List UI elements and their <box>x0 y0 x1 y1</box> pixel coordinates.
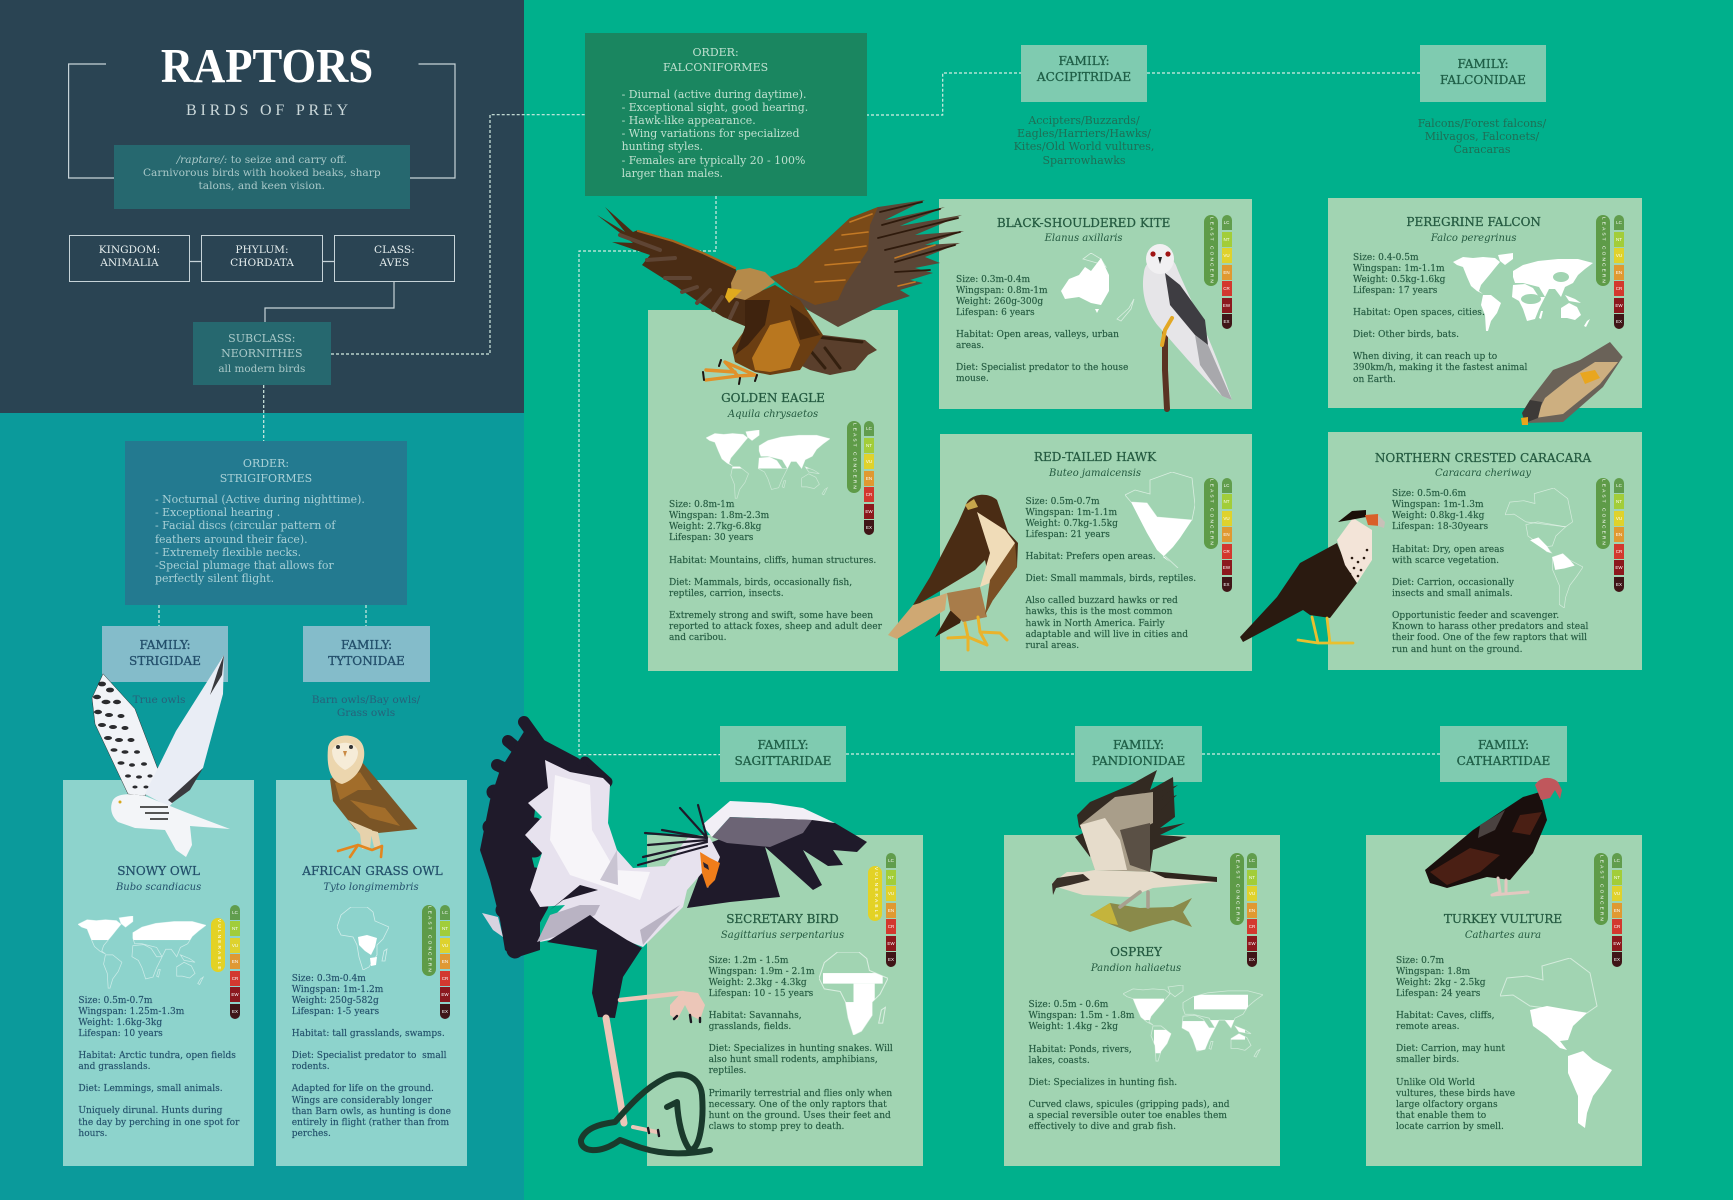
box: subclass: SUBCLASS: NEORNITHES all modern birds <box>218 332 305 375</box>
conservation status scale: LC <box>1224 220 1229 225</box>
species name: Pandion haliaetus <box>1091 963 1181 974</box>
text: strigiformes traits: - Nocturnal (Active during nighttime). - Exceptional hearing . - Facial discs (circular pattern of feathers around their face). - Extremely flexible necks. -Special plumage that allows for perfectly silent flight. <box>155 493 365 585</box>
panel: golden eagle <box>648 310 898 671</box>
definition box <box>114 145 410 209</box>
conservation status scale: EN <box>1223 532 1230 537</box>
conservation status scale: NT <box>1249 874 1255 880</box>
conservation status scale: LC <box>1224 483 1229 488</box>
conservation status label: LEAST CONCERN <box>1234 855 1240 923</box>
conservation status scale: EN <box>1616 532 1622 537</box>
conservation status scale <box>886 853 896 967</box>
conservation status scale: VU <box>232 942 238 948</box>
text: caracara facts: Size: 0.5m-0.6m Wingspan: 1m-1.3m Weight: 0.8kg-1.4kg Lifespan: 18-30years Habitat: Dry, open areas with scarce vegetation. Diet: Carrion, occasionally insects and small animals. Opportunistic feeder and scavenger. Known to harass other predators and steal their food. One of the few raptors that will run and hunt on the ground. <box>1392 489 1588 654</box>
conservation status scale: EW <box>1223 302 1230 308</box>
species name: Buteo jamaicensis <box>1049 468 1141 479</box>
conservation status scale: NT <box>1614 874 1620 880</box>
icon: african grass owl <box>328 736 418 857</box>
text: african grass owl facts: Size: 0.3m-0.4m Wingspan: 1m-1.2m Weight: 250g-582g Lifespan: 1-5 years Habitat: tall grasslands, swamps. Diet: Specialist predator to small rodents. Adapted for life on the ground. Wings are considerably longer than Barn owls, as hunting is done entirely in flight (rather than from perches. <box>292 974 451 1139</box>
heading: order falconiformes: ORDER: FALCONIFORMES <box>663 46 768 74</box>
conservation status label: VULNERABLE <box>873 867 878 920</box>
conservation status label: LEAST CONCERN <box>1601 216 1606 284</box>
map: turkey vulture range <box>1500 958 1612 1128</box>
conservation status label <box>422 904 436 976</box>
conservation status scale: EX <box>866 525 872 530</box>
box: kingdom <box>69 235 190 282</box>
species name: Sagittarius serpentarius <box>721 930 844 941</box>
box: family falconidae: FAMILY: FALCONIDAE <box>1440 57 1526 87</box>
box: family accipitridae: FAMILY: ACCIPITRIDAE <box>1037 54 1131 84</box>
heading: golden eagle: GOLDEN EAGLE <box>721 391 825 405</box>
conservation status scale: LC <box>1616 220 1622 225</box>
conservation status scale: EN <box>1249 908 1255 912</box>
icon: osprey with fish <box>1052 770 1217 932</box>
definition box: /raptare/: to seize and carry off. Carnivorous birds with hooked beaks, sharp talons, and keen vision. <box>143 154 381 192</box>
conservation status scale: EN <box>1614 908 1620 912</box>
species name: Cathartes aura <box>1465 930 1541 941</box>
map: golden eagle range <box>706 430 830 499</box>
box: class <box>334 235 455 282</box>
text: snowy owl facts: Size: 0.5m-0.7m Wingspan: 1.25m-1.3m Weight: 1.6kg-3kg Lifespan: 10 years Habitat: Arctic tundra, open fields and grasslands. Diet: Lemmings, small animals. Uniquely dirunal. Hunts during the day by perching in one spot for hours. <box>78 996 239 1139</box>
conservation status scale: EN <box>1223 270 1230 274</box>
conservation status scale: EN <box>1616 270 1622 274</box>
heading: osprey: OSPREY <box>1110 945 1162 959</box>
conservation status scale <box>1614 215 1624 329</box>
conservation status scale: NT <box>232 926 238 931</box>
conservation status scale: EX <box>1616 319 1622 324</box>
conservation status scale <box>230 905 240 1019</box>
map: kite range <box>1061 253 1134 322</box>
species name: Bubo scandiacus <box>116 882 201 892</box>
conservation status scale: NT <box>1224 236 1230 242</box>
conservation status scale: EX <box>1223 582 1230 587</box>
conservation status scale: NT <box>1224 499 1230 504</box>
species name: Aquila chrysaetos <box>728 409 818 420</box>
conservation status scale: CR <box>888 924 894 929</box>
conservation status scale: VU <box>1223 253 1230 258</box>
panel: taxonomy header background <box>0 0 524 413</box>
title: RAPTORS <box>160 38 373 93</box>
conservation status scale: VU <box>1616 253 1622 258</box>
text: osprey facts: Size: 0.5m - 0.6m Wingspan: 1.5m - 1.8m Weight: 1.4kg - 2kg Habitat: Ponds, rivers, lakes, coasts. Diet: Specializes in hunting fish. Curved claws, spicules (gripping pads), and a special reversible outer toe enables them effectively to dive and grab fish. <box>1028 1000 1230 1132</box>
map: secretary bird range <box>819 952 888 1035</box>
box: family accipitridae <box>1021 45 1147 102</box>
icon: red-tailed hawk <box>888 495 1018 650</box>
conservation status scale: CR <box>866 492 872 497</box>
panel: secretary bird <box>647 835 923 1166</box>
box: family cathartidae: FAMILY: CATHARTIDAE <box>1457 738 1550 768</box>
conservation status label: LEAST CONCERN <box>1601 479 1606 547</box>
conservation status scale: EW <box>441 992 449 997</box>
icon: golden eagle <box>597 200 964 384</box>
heading: secretary bird: SECRETARY BIRD <box>726 912 839 926</box>
icon: peregrine falcon <box>1521 342 1623 425</box>
icon: turkey vulture <box>1425 778 1562 895</box>
conservation status scale: EX <box>1223 319 1230 324</box>
map: osprey range <box>1123 985 1263 1062</box>
subtitle: BIRDS OF PREY <box>186 102 352 119</box>
heading: african grass owl: AFRICAN GRASS OWL <box>302 864 443 878</box>
box: kingdom: KINGDOM: ANIMALIA <box>99 244 160 269</box>
conservation status label: LEAST CONCERN <box>1209 479 1214 547</box>
text: strigidae members: True owls <box>133 694 185 706</box>
conservation status scale: CR <box>1223 549 1230 554</box>
heading: peregrine: PEREGRINE FALCON <box>1406 215 1541 229</box>
text: falconiformes traits: - Diurnal (active during daytime). - Exceptional sight, good hearing. - Hawk-like appearance. - Wing variations for specialized hunting styles. - Females are typically 20 - 100% larger than males. <box>622 88 808 180</box>
conservation status label <box>1596 215 1610 286</box>
conservation status scale: VU <box>1616 516 1622 521</box>
conservation status scale: CR <box>1223 286 1230 291</box>
conservation status scale: EW <box>1248 940 1256 946</box>
conservation status scale <box>1614 478 1624 592</box>
panel: black-shouldered kite <box>939 199 1252 409</box>
map: african grass owl range <box>337 907 389 970</box>
icon: black-shouldered kite <box>1143 244 1232 409</box>
panel: african grass owl <box>276 780 467 1166</box>
conservation status label <box>1204 478 1218 549</box>
conservation status scale: EW <box>1223 565 1230 570</box>
conservation status label <box>211 918 225 972</box>
box: family sagittaridae: FAMILY: SAGITTARIDAE <box>734 738 832 768</box>
panel: peregrine falcon <box>1328 198 1642 408</box>
box: phylum <box>201 235 323 282</box>
conservation status scale: LC <box>1249 858 1255 863</box>
box: family sagittaridae <box>720 726 846 782</box>
text: kite facts: Size: 0.3m-0.4m Wingspan: 0.8m-1m Weight: 260g-300g Lifespan: 6 years Habitat: Open areas, valleys, urban areas. Diet: Specialist predator to the house mouse. <box>956 274 1128 384</box>
box: family pandionidae: FAMILY: PANDIONIDAE <box>1092 738 1185 768</box>
map: snowy owl range <box>78 916 206 988</box>
box: order strigiformes <box>125 441 407 605</box>
conservation status scale <box>1247 853 1257 967</box>
text: falconidae members: Falcons/Forest falcons/ Milvagos, Falconets/ Caracaras <box>1418 117 1546 156</box>
conservation status scale: LC <box>442 910 448 914</box>
panel: owls section background <box>0 413 524 1200</box>
conservation status scale: EN <box>888 908 894 912</box>
species name: Elanus axillaris <box>1045 233 1123 244</box>
conservation status scale: VU <box>1223 516 1230 521</box>
conservation status scale: NT <box>888 874 894 880</box>
conservation status scale <box>1612 853 1622 967</box>
conservation status scale: LC <box>1614 858 1620 863</box>
conservation status scale: EW <box>1615 302 1623 308</box>
conservation status scale: LC <box>1616 483 1622 488</box>
text: turkey vulture facts: Size: 0.7m Wingspan: 1.8m Weight: 2kg - 2.5kg Lifespan: 24 years Habitat: Caves, cliffs, remote areas. Diet: Carrion, may hunt smaller birds. Unlike Old World vultures, these birds have large olfactory organs that enable them to locate carrion by smell. <box>1396 956 1515 1132</box>
conservation status scale: VU <box>866 459 872 464</box>
conservation status scale: EW <box>1613 940 1621 946</box>
species name: Caracara cheriway <box>1435 468 1531 479</box>
conservation status scale: EW <box>231 992 239 997</box>
box: family pandionidae <box>1075 726 1202 782</box>
icon: crested caracara <box>1240 510 1385 643</box>
box: phylum: PHYLUM: CHORDATA <box>230 244 294 269</box>
conservation status scale <box>864 421 874 535</box>
text: golden eagle facts: Size: 0.8m-1m Wingspan: 1.8m-2.3m Weight: 2.7kg-6.8kg Lifespan: 30 years Habitat: Mountains, cliffs, human structures. Diet: Mammals, birds, occasionally fish, reptiles, carrion, insects. Extremely strong and swift, some have been reported to attack foxes, sheep and adult deer and caribou. <box>669 500 882 643</box>
box: family cathartidae <box>1440 726 1567 782</box>
conservation status scale: NT <box>866 442 872 448</box>
conservation status scale: EN <box>866 476 872 480</box>
panel: northern crested caracara <box>1328 432 1642 670</box>
conservation status label <box>1596 478 1610 549</box>
panel: snowy owl <box>63 780 254 1166</box>
icon: snowy owl <box>92 655 230 857</box>
heading: snowy owl: SNOWY OWL <box>117 864 200 878</box>
text: accipitridae members: Accipters/Buzzards/ Eagles/Harriers/Hawks/ Kites/Old World vultures, Sparrowhawks <box>1014 114 1154 167</box>
conservation status scale: EW <box>1615 565 1623 570</box>
conservation status label <box>1594 853 1608 925</box>
map: hawk range <box>1125 472 1195 568</box>
heading: hawk: RED-TAILED HAWK <box>1034 450 1156 464</box>
conservation status scale: EN <box>442 959 448 964</box>
conservation status scale: NT <box>1616 499 1622 504</box>
heading: turkey vulture: TURKEY VULTURE <box>1444 912 1562 926</box>
conservation status scale <box>440 905 450 1019</box>
text: secretary bird facts: Size: 1.2m - 1.5m Wingspan: 1.9m - 2.1m Weight: 2.3kg - 4.3kg Lifespan: 10 - 15 years Habitat: Savannahs, grasslands, fields. Diet: Specializes in hunting snakes. Will also hunt small rodents, amphibians, reptiles. Primarily terrestrial and flies only when necessary. One of the only raptors that hunt on the ground. Uses their feet and claws to stomp prey to death. <box>709 956 893 1132</box>
conservation status scale: CR <box>1616 286 1622 291</box>
species name: Falco peregrinus <box>1431 233 1517 244</box>
conservation status scale: EX <box>1616 582 1622 587</box>
conservation status scale: VU <box>1614 891 1620 896</box>
conservation status label: LEAST CONCERN <box>852 423 856 491</box>
map: peregrine range <box>1453 253 1593 331</box>
box: class: CLASS: AVES <box>374 244 415 269</box>
box: family tytonidae <box>303 626 430 682</box>
conservation status scale: CR <box>442 976 448 980</box>
box: family strigidae: FAMILY: STRIGIDAE <box>129 638 201 668</box>
map: caracara range <box>1505 488 1583 608</box>
box: order falconiformes <box>585 33 867 196</box>
heading: order strigiformes: ORDER: STRIGIFORMES <box>220 457 312 485</box>
panel: red-tailed hawk <box>940 434 1252 671</box>
conservation status scale: VU <box>888 891 894 896</box>
conservation status scale: EW <box>865 508 873 514</box>
conservation status scale <box>1222 478 1232 592</box>
conservation status scale: CR <box>1616 549 1622 554</box>
conservation status label: LEAST CONCERN <box>1599 855 1604 923</box>
heading: caracara: NORTHERN CRESTED CARACARA <box>1375 451 1591 465</box>
conservation status scale: EX <box>442 1008 448 1014</box>
icon: secretary bird <box>480 722 867 1153</box>
conservation status scale: VU <box>442 942 448 948</box>
conservation status scale: LC <box>866 426 872 431</box>
conservation status scale: VU <box>1249 891 1255 896</box>
box: family falconidae <box>1420 45 1546 102</box>
box: subclass <box>193 322 331 385</box>
conservation status scale: EX <box>232 1008 238 1014</box>
conservation status scale: NT <box>1616 236 1622 242</box>
conservation status label: LEAST CONCERN <box>1209 216 1214 284</box>
text: tytonidae members: Barn owls/Bay owls/ Grass owls <box>312 694 420 719</box>
conservation status label <box>1230 853 1244 925</box>
text: hawk facts: Size: 0.5m-0.7m Wingspan: 1m-1.1m Weight: 0.7kg-1.5kg Lifespan: 21 years Habitat: Prefers open areas. Diet: Small mammals, birds, reptiles. Also called buzzard hawks or red hawks, this is the most common hawk in North America. Fairly adaptable and will live in cities and rural areas. <box>1026 496 1196 651</box>
panel: turkey vulture <box>1366 835 1642 1166</box>
panel: osprey <box>1004 835 1280 1166</box>
conservation status scale: CR <box>1614 924 1620 929</box>
conservation status label <box>1204 215 1218 286</box>
conservation status scale <box>1222 215 1232 329</box>
species name: Tyto longimembris <box>323 882 419 892</box>
conservation status scale: LC <box>232 910 238 914</box>
conservation status scale: EX <box>1614 957 1620 962</box>
box: family strigidae <box>102 626 228 682</box>
conservation status label: VULNERABLE <box>216 919 221 971</box>
conservation status scale: LC <box>888 858 894 863</box>
conservation status scale: EN <box>232 959 238 964</box>
heading: kite: BLACK-SHOULDERED KITE <box>997 216 1170 230</box>
conservation status scale: CR <box>1249 924 1255 929</box>
conservation status label <box>846 421 860 493</box>
text: peregrine facts: Size: 0.4-0.5m Wingspan: 1m-1.1m Weight: 0.5kg-1.6kg Lifespan: 17 years Habitat: Open spaces, cities. Diet: Other birds, bats. When diving, it can reach up to 390km/h, making it the fastest animal on Earth. <box>1353 252 1527 385</box>
conservation status scale: EX <box>1249 957 1255 962</box>
conservation status scale: EW <box>887 940 895 946</box>
box: family tytonidae: FAMILY: TYTONIDAE <box>328 638 405 668</box>
conservation status label <box>868 866 882 921</box>
conservation status scale: NT <box>442 926 448 931</box>
conservation status label: LEAST CONCERN <box>427 906 432 974</box>
conservation status scale: CR <box>232 976 238 980</box>
conservation status scale: EX <box>888 957 894 962</box>
